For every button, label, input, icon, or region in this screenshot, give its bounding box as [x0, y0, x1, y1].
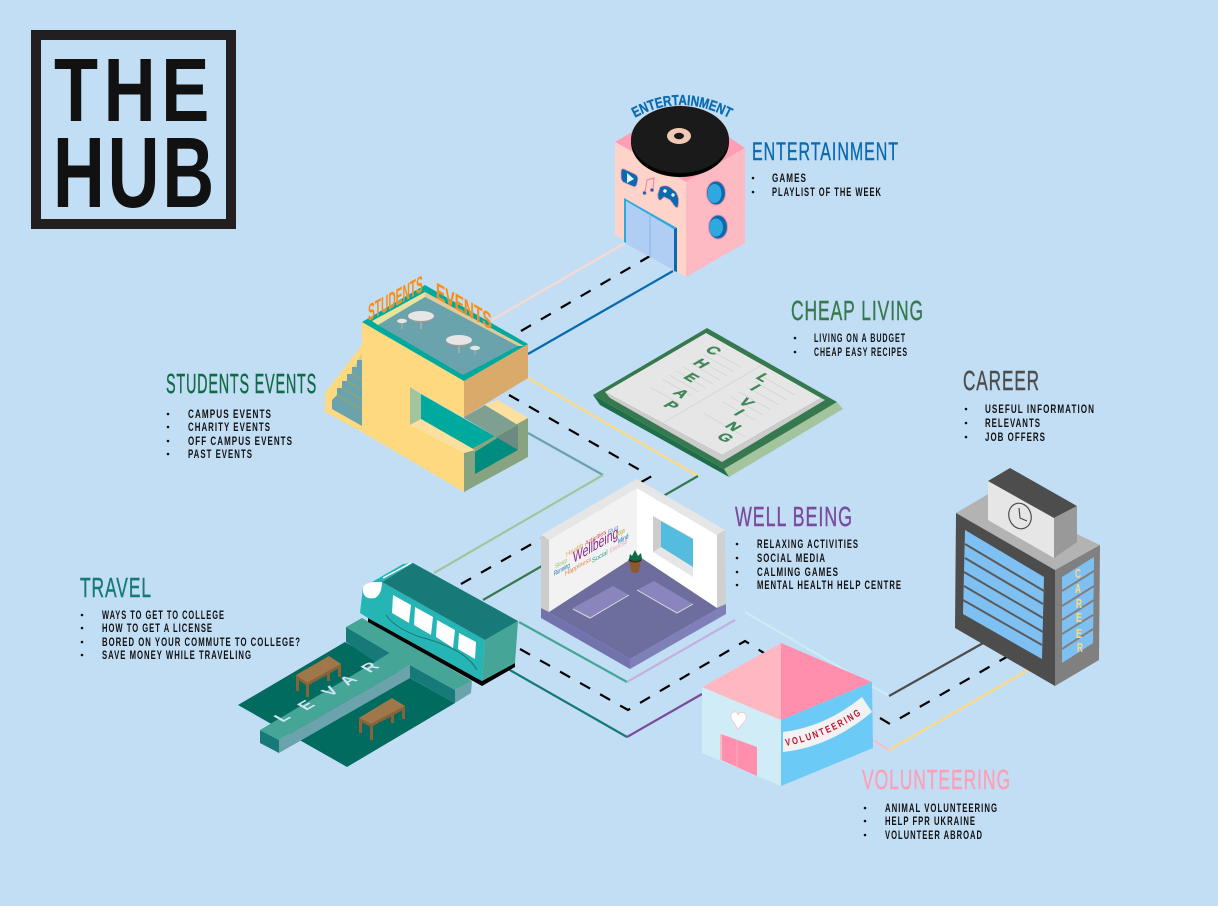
- room: well being: [541, 479, 726, 669]
- heading: volunteering: VOLUNTEERING: [862, 764, 1011, 795]
- word cloud: Sleep: [555, 557, 567, 571]
- list: travel: HOW TO GET A LICENSE: [102, 623, 213, 635]
- door: [721, 734, 757, 776]
- icon: play button: [621, 169, 638, 187]
- list: volunteering: VOLUNTEER ABROAD: [885, 830, 983, 842]
- heading: entertainment: ENTERTAINMENT: [752, 138, 899, 166]
- list: students events: PAST EVENTS: [188, 449, 253, 461]
- word cloud: Activities: [585, 529, 606, 548]
- book text: cheap: [659, 344, 725, 412]
- list: entertainment: PLAYLIST OF THE WEEK: [772, 187, 882, 199]
- word cloud: Running: [554, 562, 570, 578]
- platform letters: R: [357, 659, 384, 675]
- list: students events: CAMPUS EVENTS: [188, 409, 272, 421]
- list: career: [965, 404, 1095, 444]
- list: well being: RELAXING ACTIVITIES: [757, 539, 859, 551]
- logo: the hub: [36, 35, 231, 229]
- heading: cheap living: CHEAP LIVING: [791, 295, 924, 326]
- sign text: events: EVENTS: [436, 277, 492, 335]
- list: students events: [167, 409, 293, 461]
- book text: cheap: A: [669, 387, 693, 401]
- list: well being: [736, 539, 902, 592]
- book text: cheap: C: [701, 344, 725, 358]
- platform letters: E: [293, 698, 319, 713]
- sign letters: career: [1075, 566, 1083, 655]
- word cloud: [554, 523, 629, 578]
- book text: cheap: E: [679, 371, 703, 384]
- word cloud: Happiness: [565, 556, 591, 578]
- front windows: [963, 530, 1044, 659]
- clock block: [988, 468, 1077, 558]
- ground: [238, 642, 455, 767]
- round windows: [706, 181, 728, 239]
- list: volunteering: ANIMAL VOLUNTEERING: [885, 803, 998, 815]
- word cloud: Yoga: [616, 527, 625, 539]
- list: cheap living: LIVING ON A BUDGET: [814, 333, 906, 345]
- main front wall: [362, 322, 473, 492]
- logo: the hub: THE: [54, 41, 215, 141]
- list: entertainment: [752, 173, 882, 199]
- list: well being: SOCIAL MEDIA: [757, 553, 826, 565]
- list: career: RELEVANTS: [985, 418, 1041, 430]
- platform letters: V: [317, 683, 344, 699]
- list: well being: CALMING GAMES: [757, 567, 839, 579]
- list: students events: CHARITY EVENTS: [188, 422, 271, 434]
- building: volunteering: [702, 643, 873, 786]
- word cloud: Mind: [618, 533, 629, 546]
- sign letters: career: R: [1076, 596, 1082, 611]
- list: volunteering: [864, 803, 998, 842]
- page lines: [650, 351, 795, 437]
- train windows: [392, 595, 476, 659]
- icon: gamepad: [658, 186, 679, 208]
- sign text: students: STUDENTS: [368, 270, 423, 326]
- heading: travel: TRAVEL: [80, 572, 152, 603]
- heading: career: CAREER: [963, 365, 1040, 396]
- icon: plant: [628, 550, 642, 573]
- roof: [362, 285, 528, 381]
- icon: music note: [643, 178, 654, 195]
- word cloud: Social: [592, 549, 608, 565]
- list: students events: OFF CAMPUS EVENTS: [188, 436, 293, 448]
- list: well being: MENTAL HEALTH HELP CENTRE: [757, 580, 902, 592]
- icon: clock: [1005, 500, 1035, 532]
- book text: living: I: [730, 407, 748, 418]
- book: cheap living: [593, 328, 843, 477]
- list: cheap living: [794, 333, 908, 359]
- book text: cheap: P: [659, 399, 683, 412]
- table: [359, 698, 405, 740]
- list: volunteering: HELP FPR UKRAINE: [885, 816, 976, 828]
- sign letters: career: A: [1075, 581, 1081, 596]
- sign letters: career: C: [1075, 566, 1081, 581]
- book text: living: V: [734, 396, 758, 409]
- platform letters: L: [269, 710, 295, 725]
- building: student events: [325, 270, 528, 492]
- book text: living: I: [746, 382, 764, 393]
- upper right wall: [464, 344, 528, 417]
- building: entertainment: [615, 94, 745, 277]
- side windows: [1062, 557, 1094, 663]
- sign letters: career: E: [1076, 610, 1082, 625]
- station: travel: [238, 563, 518, 767]
- platform letters: A: [335, 672, 362, 688]
- curved sign text: ENTERTAINMENT: [630, 94, 734, 118]
- heading: well being: WELL BEING: [735, 501, 853, 532]
- platform: [260, 618, 472, 753]
- book text: cheap: H: [689, 357, 713, 371]
- mats: [573, 581, 693, 618]
- icon: heart: [731, 712, 746, 729]
- book text: living: G: [712, 431, 737, 445]
- platform letters: [269, 659, 384, 725]
- book text: living: [712, 371, 774, 445]
- list: travel: [81, 610, 301, 662]
- heading: students events: STUDENTS EVENTS: [166, 368, 317, 399]
- door: [624, 198, 677, 272]
- word cloud: Run: [608, 524, 619, 537]
- list: travel: SAVE MONEY WHILE TRAVELING: [102, 650, 252, 662]
- word cloud: Health: [566, 542, 583, 559]
- logo: the hub: HUB: [53, 117, 217, 229]
- list: travel: BORED ON YOUR COMMUTE TO COLLEGE?: [102, 637, 301, 649]
- lower courtyard: [464, 405, 518, 437]
- list: career: USEFUL INFORMATION: [985, 404, 1095, 416]
- sign letters: career: R: [1077, 640, 1083, 655]
- word cloud: Wellbeing: [573, 523, 618, 567]
- book text: living: N: [721, 420, 745, 434]
- list: career: JOB OFFERS: [985, 432, 1046, 444]
- window: [653, 516, 693, 577]
- list: travel: WAYS TO GET TO COLLEGE: [102, 610, 225, 622]
- building: career: [955, 468, 1100, 686]
- stairs: [325, 345, 362, 432]
- train: [360, 563, 518, 686]
- list: cheap living: CHEAP EASY RECIPES: [814, 347, 908, 359]
- sign letters: career: E: [1076, 626, 1082, 641]
- word cloud: Exercise: [610, 538, 627, 555]
- table: [296, 656, 341, 697]
- banner: VOLUNTEERING: [784, 710, 860, 746]
- book text: living: L: [752, 371, 774, 384]
- icon: vinyl record: [631, 106, 729, 177]
- connecting roads: [434, 243, 1030, 750]
- list: entertainment: GAMES: [772, 173, 807, 185]
